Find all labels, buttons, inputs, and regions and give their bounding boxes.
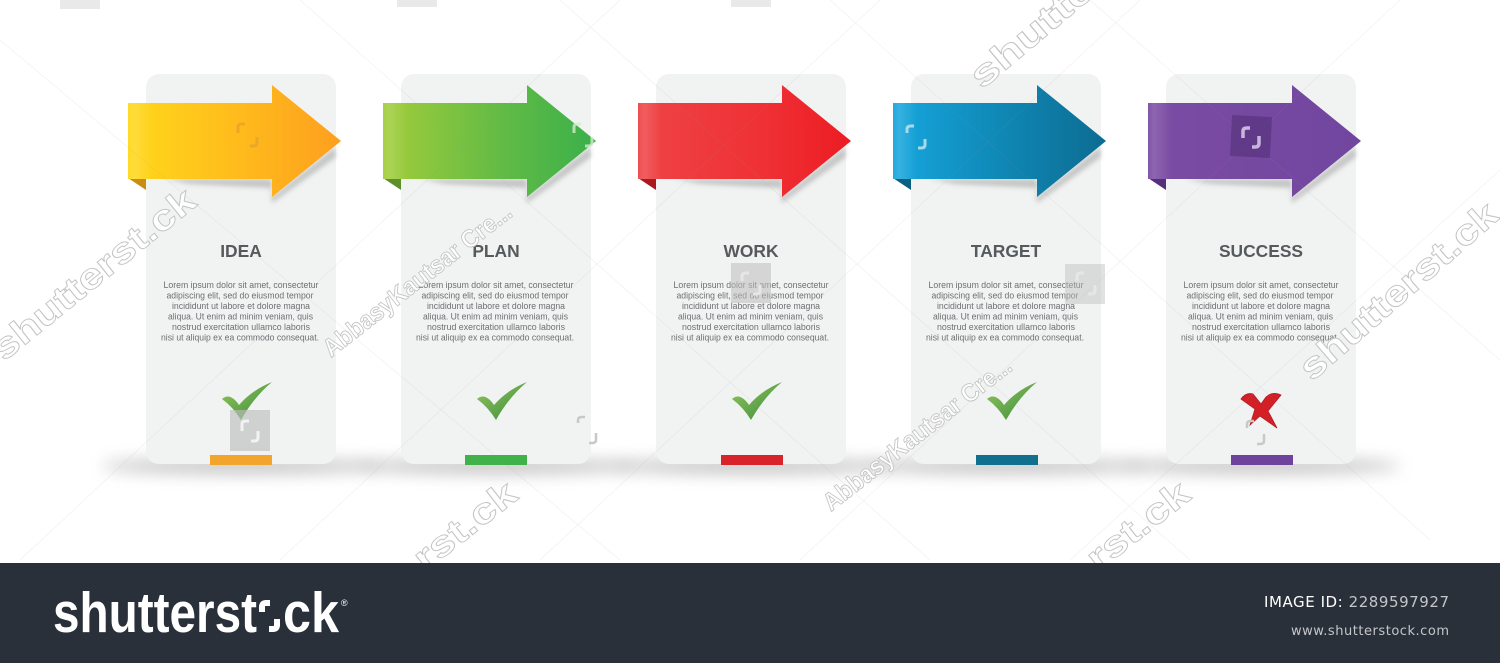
panel: success [1121,74,1401,474]
text block: target [926,280,1084,342]
watermark overlay: rst.ck [405,471,525,578]
panel: work [611,74,891,474]
card: idea [146,74,336,464]
text block: idea: nostrud exercitation ullamco laboris [172,322,311,332]
text block: target: Lorem ipsum dolor sit amet, consectetur [928,280,1084,290]
text block: idea: nisi ut aliquip ex ea commodo consequat. [161,332,319,342]
icon: check [222,382,272,420]
text block: idea: adipiscing elit, sed do eiusmod tempor [166,290,314,300]
text block: success [1181,280,1339,342]
text block: idea: incididunt ut labore et dolore magna [172,301,310,311]
text block: success: nostrud exercitation ullamco laboris [1192,322,1331,332]
text block: plan: nostrud exercitation ullamco laboris [427,322,566,332]
text block: success: aliqua. Ut enim ad minim veniam, quis [1188,312,1334,322]
icon: check [477,382,527,420]
accent bar: plan [465,455,527,465]
text block: idea: aliqua. Ut enim ad minim veniam, quis [168,312,314,322]
panel: idea [101,74,381,474]
text block: target: incididunt ut labore et dolore magna [937,301,1075,311]
text block: work: aliqua. Ut enim ad minim veniam, quis [678,312,824,322]
text block: work: Lorem ipsum dolor sit amet, consectetur [674,280,829,290]
arrow: plan [383,85,596,203]
text block: success: incididunt ut labore et dolore magna [1192,301,1330,311]
heading: plan: PLAN [472,241,520,261]
heading: idea: IDEA [220,241,262,261]
text block: target: nisi ut aliquip ex ea commodo consequat. [926,332,1084,342]
accent bar: work [721,455,783,465]
accent bar: success [1231,455,1293,465]
heading: work: WORK [723,241,779,261]
text block: work: nisi ut aliquip ex ea commodo consequat. [671,332,829,342]
heading: target: TARGET [971,241,1041,261]
panel: target [866,74,1146,474]
text block: plan: aliqua. Ut enim ad minim veniam, quis [423,312,569,322]
arrow: target [893,85,1106,203]
registered mark: ® [341,598,348,608]
text block: target: nostrud exercitation ullamco laboris [937,322,1076,332]
card: work [656,74,846,464]
icon: check [732,382,782,420]
text block: work [671,280,829,342]
text block: plan: incididunt ut labore et dolore magna [427,301,565,311]
text block: success: adipiscing elit, sed do eiusmod tempor [1186,290,1334,300]
panel: plan [356,74,636,474]
footer logo: ck [283,581,339,645]
text block: work: incididunt ut labore et dolore magna [682,301,820,311]
watermark overlay: AbbasyKautsar Cre... [817,352,1018,517]
text block: work: nostrud exercitation ullamco laboris [682,322,821,332]
heading: success: SUCCESS [1219,241,1303,261]
footer bar [0,563,1500,663]
website: www.shutterstock.com [1291,624,1449,639]
text block: target: adipiscing elit, sed do eiusmod tempor [932,290,1079,300]
watermark overlay: shutterst.ck [1290,192,1500,388]
accent bar: idea [210,455,272,465]
text block: plan: nisi ut aliquip ex ea commodo consequat. [416,332,574,342]
icon: cross [1241,393,1281,428]
text block: work: adipiscing elit, sed do eiusmod tempor [676,290,824,300]
text block: plan: adipiscing elit, sed do eiusmod tempor [422,290,569,300]
card: target [911,74,1101,464]
text block: target: aliqua. Ut enim ad minim veniam, quis [933,312,1079,322]
text block: plan [416,280,574,342]
watermark overlay: AbbasyKautsar Cre... [317,198,518,363]
footer logo: shutterst [53,581,257,645]
icon: check [987,382,1037,420]
text block: success: nisi ut aliquip ex ea commodo consequat. [1181,332,1339,342]
image id: IMAGE ID: 2289597927 [1264,593,1449,611]
text block: idea [161,280,319,342]
arrow: idea [128,85,341,203]
watermark overlay: rst.ck [1078,471,1198,578]
arrow: success [1148,85,1361,203]
card: success [1166,74,1356,464]
card: plan [401,74,591,464]
text block: idea: Lorem ipsum dolor sit amet, consectetur [164,280,319,290]
text block: plan: Lorem ipsum dolor sit amet, consectetur [418,280,574,290]
accent bar: target [976,455,1038,465]
arrow: work [638,85,851,203]
text block: success: Lorem ipsum dolor sit amet, consectetur [1184,280,1339,290]
